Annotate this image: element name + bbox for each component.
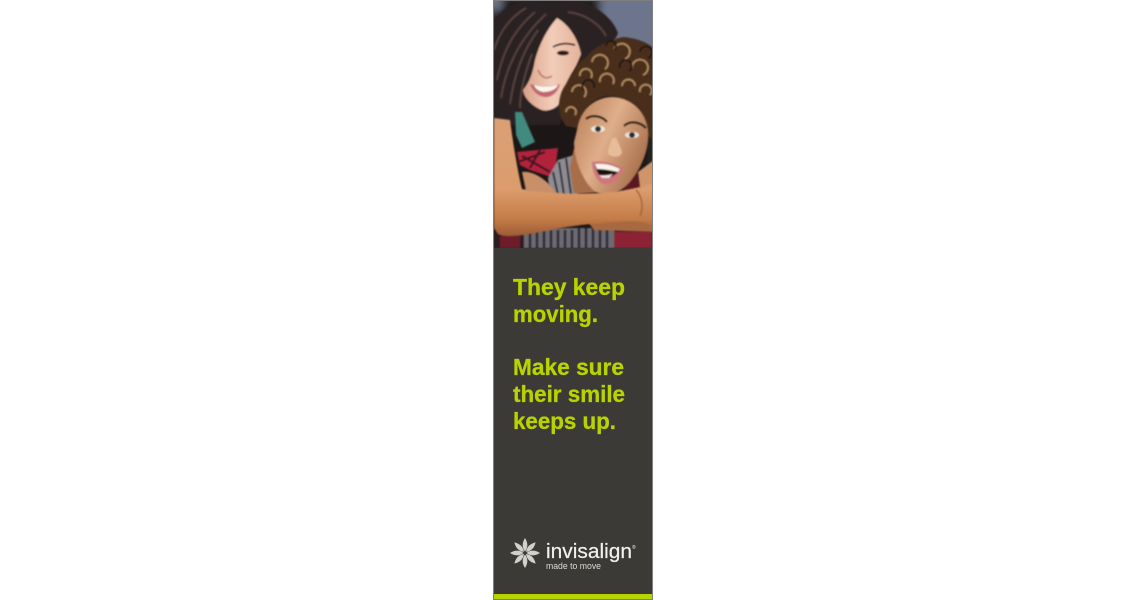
line: keeps up.: keeps up.: [513, 408, 616, 434]
man's open mouth: [592, 161, 623, 184]
woman's hair: [494, 0, 618, 125]
woman's nose shadow: [538, 70, 552, 78]
man's neck: [570, 148, 600, 194]
man's arm and hand: [494, 118, 654, 236]
teal top: [515, 112, 535, 148]
photo backdrop: [494, 1, 652, 228]
dark red shirt behind chin: [624, 172, 640, 190]
man's face: [570, 97, 654, 232]
line: They keep: They keep: [513, 274, 625, 300]
woman's eye and brow: [553, 44, 575, 47]
logo wordmark: [546, 540, 636, 571]
green footer bar: [494, 594, 652, 599]
hand on arm: [522, 172, 556, 193]
red plaid shirt: [517, 148, 558, 178]
second arm and shoulder: [588, 220, 652, 233]
headline text: [513, 274, 625, 434]
man's curly hair: [559, 37, 654, 140]
registered mark: ®: [632, 544, 636, 551]
line: moving.: moving.: [513, 301, 598, 327]
tagline: made to move: [546, 561, 601, 571]
grey striped top: [548, 155, 578, 195]
man's eyes and brows: [586, 116, 646, 128]
woman's smile: [530, 84, 560, 97]
bottom clothing strip: [494, 230, 651, 248]
brand name: invisalign: [546, 540, 632, 563]
line: their smile: their smile: [513, 381, 625, 407]
line: Make sure: Make sure: [513, 354, 624, 380]
clothing and lower strip: [494, 112, 652, 248]
man's nose: [608, 138, 622, 157]
banner border: [494, 0, 652, 600]
woman's face: [523, 18, 581, 110]
icon: invisalign star logo: [510, 538, 540, 568]
woman: [494, 0, 618, 125]
photo: two smiling teenagers: [494, 1, 652, 248]
ad banner: [493, 0, 653, 600]
